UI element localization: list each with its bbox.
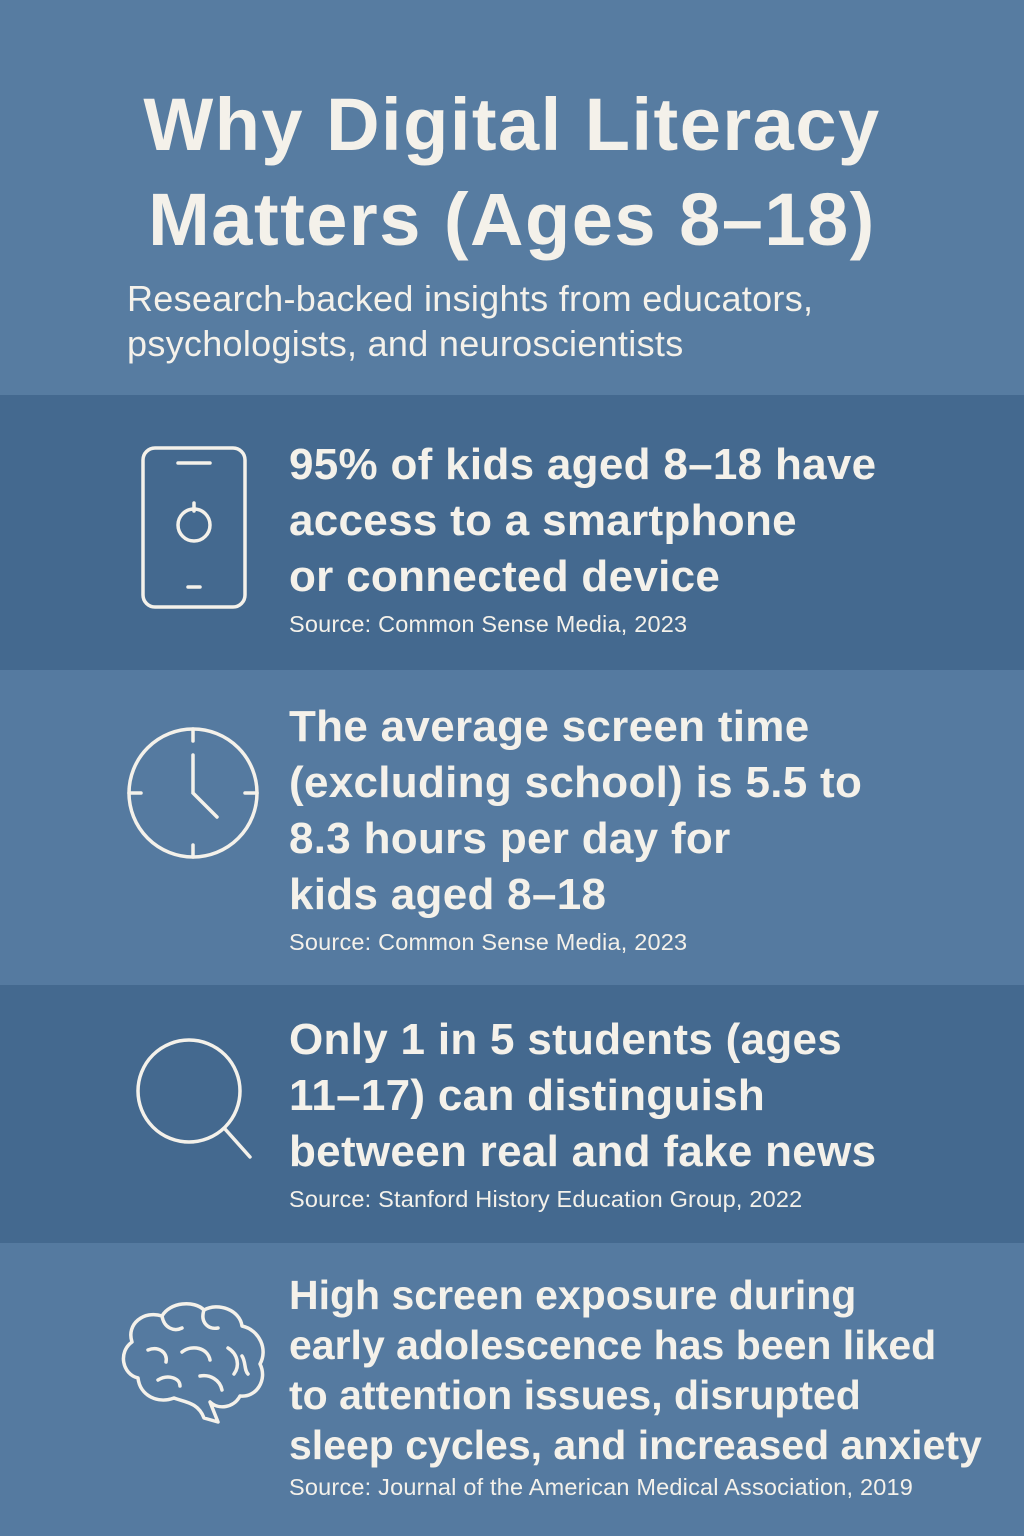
stat text [289, 702, 862, 955]
title: Why Digital Literacy [143, 83, 881, 166]
icon: magnifier [136, 1038, 252, 1159]
icon: smartphone [141, 446, 247, 609]
subtitle: Research-backed insights from educators, [127, 278, 813, 319]
stat text: to attention issues, disrupted [289, 1372, 861, 1418]
stat text: (excluding school) is 5.5 to [289, 758, 862, 807]
stat text: 8.3 hours per day for [289, 814, 731, 863]
stat text: Source: Common Sense Media, 2023 [289, 611, 687, 637]
stat text: Only 1 in 5 students (ages [289, 1015, 842, 1064]
stat text: Source: Stanford History Education Group, 2022 [289, 1186, 802, 1212]
stat text: between real and fake news [289, 1127, 876, 1176]
icon: clock [127, 727, 259, 859]
panel: brain stat [0, 1243, 1024, 1536]
title [143, 83, 881, 261]
stat text [289, 440, 876, 637]
header [0, 0, 1024, 395]
stat text: High screen exposure during [289, 1272, 856, 1318]
stat text: early adolescence has been liked [289, 1322, 936, 1368]
stat text: kids aged 8–18 [289, 870, 606, 919]
stat text: or connected device [289, 552, 720, 601]
panel: fake news stat [0, 985, 1024, 1243]
stat text: access to a smartphone [289, 496, 797, 545]
panel: screen time stat [0, 670, 1024, 985]
title: Matters (Ages 8–18) [148, 178, 876, 261]
panel: smartphone stat [0, 395, 1024, 670]
stat text: 11–17) can distinguish [289, 1071, 765, 1120]
stat text: 95% of kids aged 8–18 have [289, 440, 876, 489]
subtitle [127, 278, 813, 364]
stat text [289, 1015, 876, 1212]
stat text: The average screen time [289, 702, 810, 751]
stat text [289, 1272, 982, 1500]
icon: brain [122, 1302, 265, 1424]
stat text: Source: Common Sense Media, 2023 [289, 929, 687, 955]
stat text: Source: Journal of the American Medical Association, 2019 [289, 1474, 913, 1500]
stat text: sleep cycles, and increased anxiety [289, 1422, 982, 1468]
subtitle: psychologists, and neuroscientists [127, 323, 684, 364]
